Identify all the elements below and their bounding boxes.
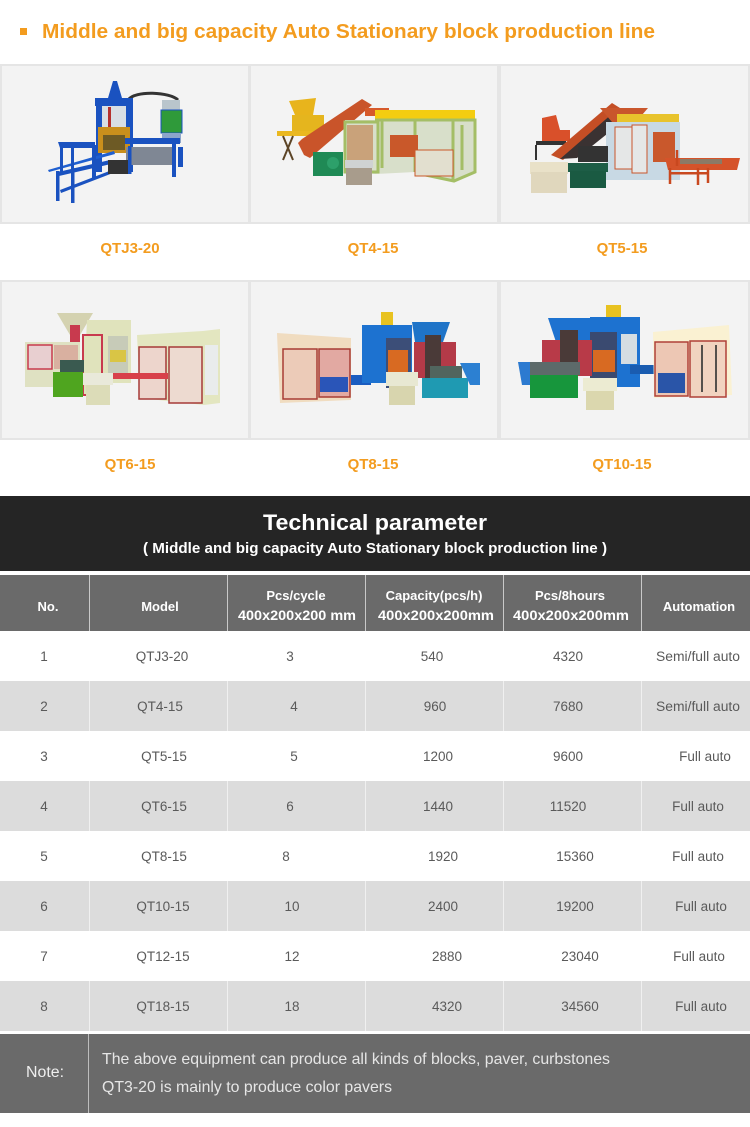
- label: QT8-15: QT8-15: [348, 456, 398, 473]
- table row 5: 15360: [556, 849, 594, 864]
- label: QT6-15: QT6-15: [105, 456, 155, 473]
- product grid: [1, 65, 749, 473]
- label: QTJ3-20: QTJ3-20: [100, 240, 160, 257]
- table row 2: 2: [40, 699, 48, 714]
- table row 7: Full auto: [673, 949, 725, 964]
- table row 7: 12: [284, 949, 300, 964]
- table row 1: [0, 631, 750, 681]
- panel: QT8-15: [250, 281, 498, 439]
- icon: QTJ3-20 machine: [48, 81, 183, 203]
- table row 6: QT10-15: [136, 899, 190, 914]
- table row 2: 7680: [553, 699, 583, 714]
- icon: QT10-15 machine: [518, 305, 732, 410]
- table row 4: 11520: [550, 799, 586, 814]
- table header row: Automation: [663, 599, 735, 614]
- table row 5: 8: [282, 849, 290, 864]
- icon: QT6-15 machine: [25, 313, 220, 405]
- table row 4: Full auto: [672, 799, 724, 814]
- table row 8: 34560: [561, 999, 599, 1014]
- icon: QT4-15 machine: [277, 98, 475, 185]
- panel: QT5-15: [500, 65, 749, 223]
- table row 1: 1: [40, 649, 48, 664]
- table row 6: 2400: [428, 899, 458, 914]
- table header row: 400x200x200 mm: [238, 607, 356, 623]
- table row 5: QT8-15: [141, 849, 187, 864]
- table row 3: [0, 731, 750, 781]
- note panel: Note:: [26, 1064, 64, 1081]
- table row 2: 4: [290, 699, 298, 714]
- table row 5: 5: [40, 849, 48, 864]
- table row 8: 8: [40, 999, 48, 1014]
- table row 1: QTJ3-20: [136, 649, 188, 664]
- table row 1: 4320: [553, 649, 583, 664]
- table row 1: 3: [286, 649, 294, 664]
- table row 6: 6: [40, 899, 48, 914]
- table row 3: 3: [40, 749, 48, 764]
- table row 6: [0, 881, 750, 931]
- note panel: The above equipment can produce all kinds of blocks, paver, curbstones: [102, 1051, 610, 1068]
- heading banner: technical parameter: ( Middle and big capacity Auto Stationary block production line ): [143, 541, 607, 557]
- table row 4: 6: [286, 799, 294, 814]
- table row 8: 4320: [432, 999, 462, 1014]
- table row 3: 9600: [553, 749, 583, 764]
- table row 8: QT18-15: [136, 999, 190, 1014]
- parameter table: [0, 575, 750, 1031]
- panel: QT10-15: [500, 281, 749, 439]
- table header row: Pcs/8hours: [535, 588, 605, 603]
- table header row: [0, 575, 750, 631]
- table row 7: 7: [40, 949, 48, 964]
- table row 1: Semi/full auto: [656, 649, 740, 664]
- table row 6: 10: [284, 899, 300, 914]
- table row 3: Full auto: [679, 749, 731, 764]
- table row 2: QT4-15: [137, 699, 183, 714]
- table row 4: QT6-15: [141, 799, 187, 814]
- table row 3: QT5-15: [141, 749, 187, 764]
- table row 8: Full auto: [675, 999, 727, 1014]
- icon: QT8-15 machine: [277, 312, 480, 405]
- table header row: 400x200x200mm: [378, 607, 494, 623]
- table header row: Pcs/cycle: [266, 588, 326, 603]
- table row 1: 540: [421, 649, 443, 664]
- table row 4: [0, 781, 750, 831]
- table row 7: [0, 931, 750, 981]
- table row 7: 23040: [561, 949, 599, 964]
- label: QT4-15: QT4-15: [348, 240, 398, 257]
- heading banner: technical parameter: [0, 496, 750, 571]
- table header row: Capacity(pcs/h): [386, 588, 482, 603]
- table row 2: [0, 681, 750, 731]
- table row 8: [0, 981, 750, 1031]
- table row 4: 1440: [423, 799, 453, 814]
- table row 6: 19200: [556, 899, 594, 914]
- table row 3: 5: [290, 749, 298, 764]
- icon: QT5-15 machine: [530, 103, 740, 193]
- table header row: No.: [38, 599, 58, 614]
- panel: QTJ3-20: [1, 65, 249, 223]
- title: Middle and big capacity Auto Stationary block production line: [42, 21, 655, 43]
- panel: QT4-15: [250, 65, 498, 223]
- table row 8: 18: [284, 999, 300, 1014]
- table row 7: 2880: [432, 949, 462, 964]
- table row 3: 1200: [423, 749, 453, 764]
- panel: QT6-15: [1, 281, 249, 439]
- heading banner: technical parameter: Technical parameter: [263, 510, 487, 535]
- table row 5: [0, 831, 750, 881]
- label: QT5-15: QT5-15: [597, 240, 647, 257]
- table row 2: 960: [424, 699, 446, 714]
- table header row: Model: [141, 599, 179, 614]
- note panel: [0, 1034, 750, 1113]
- note panel: QT3-20 is mainly to produce color pavers: [102, 1079, 392, 1096]
- table row 2: Semi/full auto: [656, 699, 740, 714]
- label: QT10-15: QT10-15: [592, 456, 652, 473]
- table row 5: Full auto: [672, 849, 724, 864]
- table row 6: Full auto: [675, 899, 727, 914]
- table row 4: 4: [40, 799, 48, 814]
- table header row: 400x200x200mm: [513, 607, 629, 623]
- table row 5: 1920: [428, 849, 458, 864]
- table row 7: QT12-15: [136, 949, 190, 964]
